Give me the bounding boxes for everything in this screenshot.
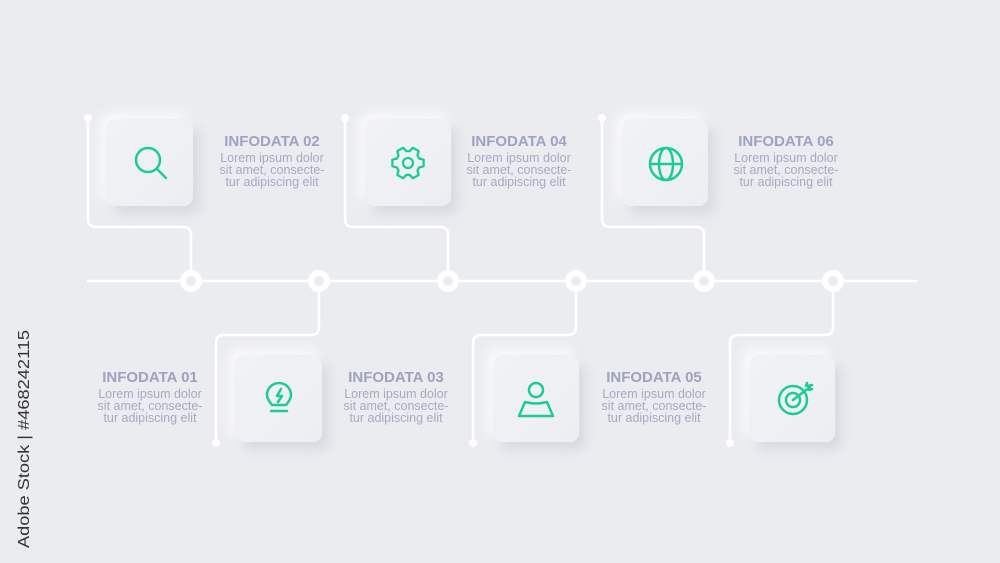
text blocks: sit amet, consecte- [344, 399, 448, 413]
text blocks: tur adipiscing elit [607, 411, 701, 425]
card 07: target [749, 355, 835, 442]
text blocks: tur adipiscing elit [103, 411, 197, 425]
text blocks: sit amet, consecte- [220, 163, 324, 177]
text blocks: INFODATA 06 [738, 133, 834, 150]
text blocks: tur adipiscing elit [472, 175, 566, 189]
watermark: Adobe Stock | #468242115 [16, 330, 33, 548]
card 06: globe [622, 119, 708, 206]
text blocks: tur adipiscing elit [225, 175, 319, 189]
text blocks: sit amet, consecte- [98, 399, 202, 413]
card 02: search [106, 119, 193, 206]
text blocks: sit amet, consecte- [602, 399, 706, 413]
text blocks: tur adipiscing elit [739, 175, 833, 189]
timeline [88, 118, 916, 443]
card 03: bulb [235, 355, 322, 442]
text blocks: Lorem ipsum dolor [467, 151, 571, 165]
card 05: person [493, 355, 579, 442]
text blocks [98, 133, 838, 425]
timeline nodes [183, 273, 841, 289]
text blocks: sit amet, consecte- [734, 163, 838, 177]
text blocks: Lorem ipsum dolor [344, 387, 448, 401]
text blocks: INFODATA 01 [102, 369, 198, 386]
card 04: gear [365, 119, 451, 206]
text blocks: INFODATA 02 [224, 133, 320, 150]
text blocks: INFODATA 05 [606, 369, 702, 386]
text blocks: Lorem ipsum dolor [220, 151, 324, 165]
text blocks: Lorem ipsum dolor [98, 387, 202, 401]
text blocks: INFODATA 04 [471, 133, 567, 150]
text blocks: tur adipiscing elit [349, 411, 443, 425]
text blocks: INFODATA 03 [348, 369, 444, 386]
text blocks: Lorem ipsum dolor [734, 151, 838, 165]
text blocks: Lorem ipsum dolor [602, 387, 706, 401]
text blocks: sit amet, consecte- [467, 163, 571, 177]
